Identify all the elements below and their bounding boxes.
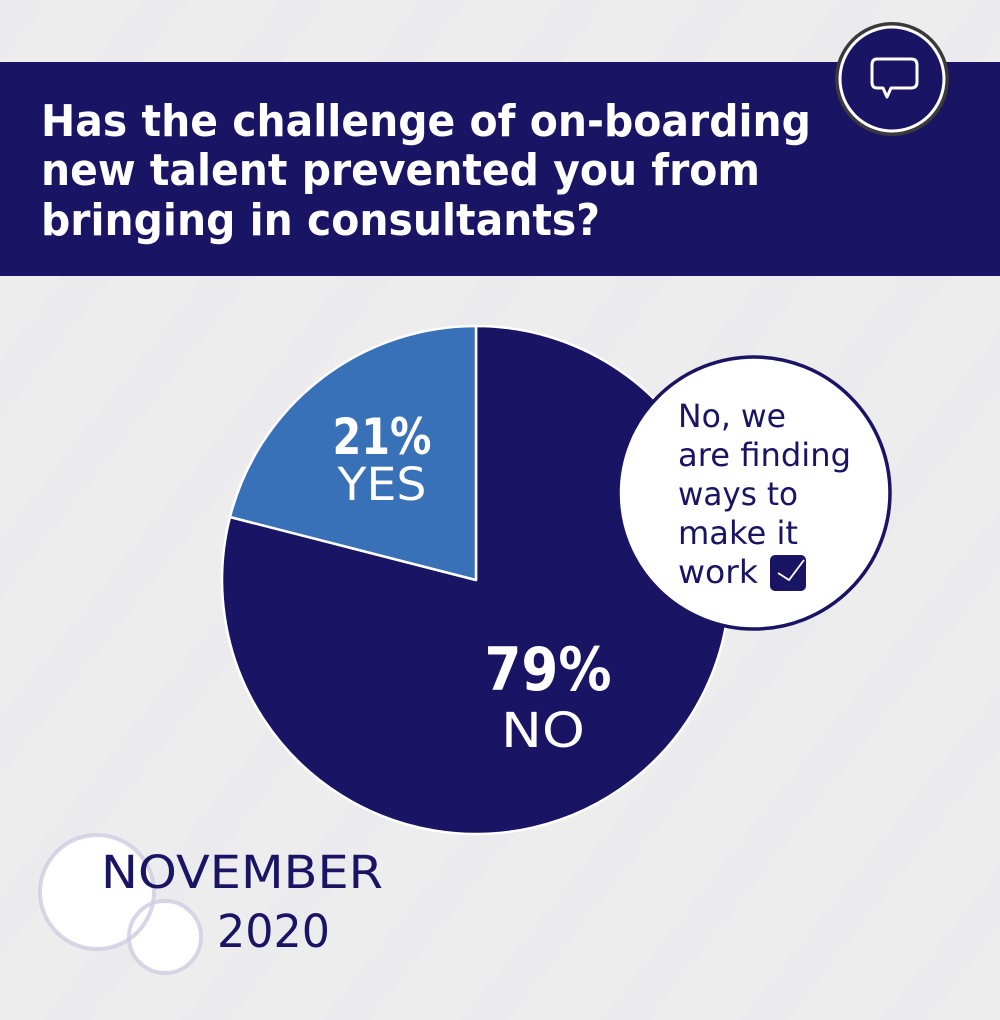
icon: checkbox — [770, 555, 806, 591]
label: 21% yes: 21% — [332, 408, 432, 466]
slice: yes 21% — [230, 326, 476, 580]
callout text: are finding — [678, 436, 851, 474]
slice: no 79% — [222, 326, 730, 834]
callout text: work — [678, 553, 758, 591]
date label: 2020 — [217, 905, 330, 958]
callout text: No, we — [678, 397, 786, 435]
date label: NOVEMBER — [101, 846, 383, 899]
date decoration circles — [40, 835, 201, 973]
label: 21% yes — [332, 408, 432, 511]
header banner — [0, 62, 1000, 276]
label: 79% no: 79% — [484, 635, 612, 705]
title: bringing in consultants? — [41, 195, 600, 246]
title: Has the challenge of on-boarding — [41, 96, 811, 147]
pie chart — [222, 326, 730, 834]
label: 21% yes: YES — [336, 458, 426, 511]
date label — [101, 846, 383, 958]
title — [41, 96, 811, 246]
label: 79% no — [484, 635, 612, 759]
icon: speech bubble badge — [835, 22, 949, 136]
label: 79% no: NO — [501, 703, 585, 759]
callout — [618, 357, 890, 629]
callout text: ways to — [678, 475, 798, 513]
title: new talent prevented you from — [41, 145, 760, 196]
callout text — [678, 397, 851, 591]
callout text: make it — [678, 514, 798, 552]
